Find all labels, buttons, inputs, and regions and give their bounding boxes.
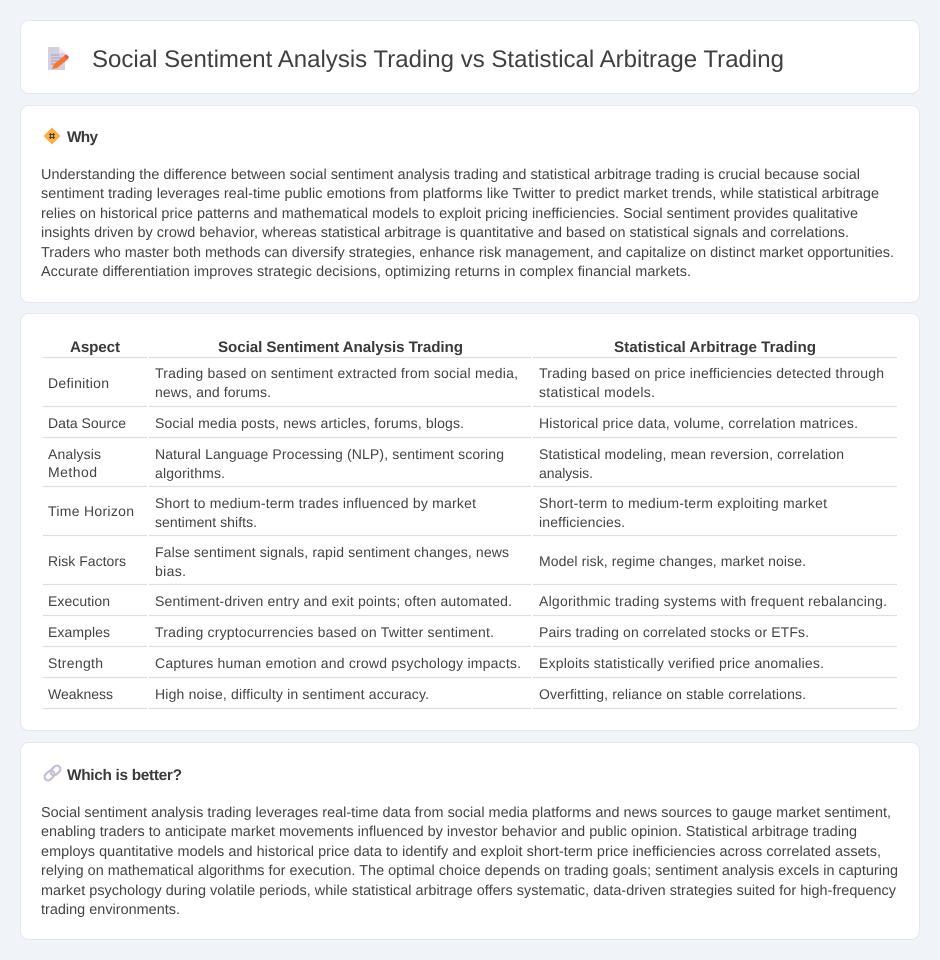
row: analysis method: algorithms. [155, 465, 225, 481]
row: risk factors: bias. [155, 563, 186, 579]
row: execution: Execution [48, 593, 110, 609]
text block: why paragraph: Accurate differentiation improves strategic decisions, optimizing returns in complex financial markets. [41, 264, 691, 280]
row: definition: Trading based on price inefficiencies detected through [539, 365, 884, 381]
panel: why [20, 106, 920, 302]
row: weakness: High noise, difficulty in sentiment accuracy. [155, 686, 429, 702]
row: weakness: Overfitting, reliance on stable correlations. [539, 686, 806, 702]
text block: which is better paragraph: trading environments. [41, 902, 180, 918]
row: definition: Definition [48, 375, 109, 391]
panel: which is better [20, 742, 920, 940]
row: definition [48, 365, 884, 400]
row: examples: Pairs trading on correlated stocks or ETFs. [539, 624, 809, 640]
row: risk factors: False sentiment signals, rapid sentiment changes, news [155, 544, 509, 560]
row: time horizon: Short-term to medium-term exploiting market [539, 495, 827, 511]
text block: why paragraph: insights driven by crowd behavior, whereas statistical arbitrage is quantitative and based on statistical signals and correlations. [41, 225, 849, 241]
row: strength: Exploits statistically verified price anomalies. [539, 655, 824, 671]
text block: why paragraph: Understanding the difference between social sentiment analysis trading and statistical arbitrage trading is crucial because social [41, 167, 860, 183]
row: data source [48, 415, 858, 431]
row: analysis method: Natural Language Processing (NLP), sentiment scoring [155, 446, 504, 462]
row: data source: Data Source [48, 415, 126, 431]
row: strength: Strength [48, 655, 103, 671]
row: analysis method: Analysis [48, 446, 101, 462]
row: execution [48, 593, 887, 609]
panel: title card [20, 20, 920, 94]
row: strength [48, 655, 824, 671]
table header: Statistical Arbitrage Trading [614, 339, 816, 356]
text block: which is better paragraph: enabling traders to anticipate market movements influenced by investor behavior and public opinion. Statistical arbitrage trading [41, 824, 857, 840]
icon: diamond sign [44, 128, 60, 144]
text block: which is better paragraph: relying on mathematical algorithms for execution. The optimal choice depends on trading goals; sentiment analysis excels in capturing [41, 863, 898, 879]
row: examples: Examples [48, 624, 110, 640]
row: risk factors [48, 544, 806, 579]
row: analysis method: Statistical modeling, mean reversion, correlation [539, 446, 844, 462]
row: analysis method: analysis. [539, 465, 593, 481]
row: weakness: Weakness [48, 686, 113, 702]
panel: comparison table [20, 314, 920, 730]
row: analysis method [48, 446, 844, 481]
icon: link [43, 764, 62, 782]
heading: which is better: Which is better? [67, 767, 182, 784]
row: strength: Captures human emotion and crowd psychology impacts. [155, 655, 521, 671]
text block: which is better paragraph: market psychology during volatile periods, while statistical arbitrage offers systematic, data-driven strategies suited for high-frequency [41, 883, 897, 899]
table header [70, 339, 816, 356]
row: risk factors: Risk Factors [48, 553, 126, 569]
row: definition: news, and forums. [155, 384, 271, 400]
text block: why paragraph [41, 167, 894, 280]
text block: which is better paragraph: employs quantitative models and historical price data to identify and exploit short-term price inefficiencies across correlated assets, [41, 844, 881, 860]
text block: which is better paragraph [41, 805, 898, 918]
table header: Social Sentiment Analysis Trading [218, 339, 463, 356]
row: time horizon: Short to medium-term trades influenced by market [155, 495, 476, 511]
row: examples [48, 624, 809, 640]
text block: why paragraph: sentiment trading leverages real-time public emotions from platforms like Twitter to predict market trends, while statistical arbitrage [41, 186, 879, 202]
row: definition: statistical models. [539, 384, 655, 400]
row: weakness [48, 686, 806, 702]
row: time horizon: inefficiencies. [539, 514, 625, 530]
heading: why: Why [67, 129, 98, 146]
text block: which is better paragraph: Social sentiment analysis trading leverages real-time data from social media platforms and news sources to gauge market sentiment, [41, 805, 891, 821]
icon: document with pencil [48, 47, 69, 70]
title: Social Sentiment Analysis Trading vs Statistical Arbitrage Trading [92, 46, 784, 73]
row: time horizon: sentiment shifts. [155, 514, 257, 530]
row: risk factors: Model risk, regime changes, market noise. [539, 553, 806, 569]
row: time horizon [48, 495, 827, 530]
row: data source: Historical price data, volume, correlation matrices. [539, 415, 858, 431]
row: execution: Algorithmic trading systems with frequent rebalancing. [539, 593, 887, 609]
row: time horizon: Time Horizon [48, 503, 134, 519]
row: analysis method: Method [48, 464, 97, 480]
text block: why paragraph: relies on historical price patterns and mathematical models to exploit pricing inefficiencies. Social sentiment provides qualitative [41, 206, 858, 222]
table header: Aspect [70, 339, 120, 356]
row: data source: Social media posts, news articles, forums, blogs. [155, 415, 464, 431]
text block: why paragraph: Traders who master both methods can diversify strategies, enhance risk management, and capitalize on distinct market opportunities. [41, 245, 894, 261]
row: examples: Trading cryptocurrencies based on Twitter sentiment. [155, 624, 494, 640]
row: definition: Trading based on sentiment extracted from social media, [155, 365, 518, 381]
row: execution: Sentiment-driven entry and exit points; often automated. [155, 593, 512, 609]
